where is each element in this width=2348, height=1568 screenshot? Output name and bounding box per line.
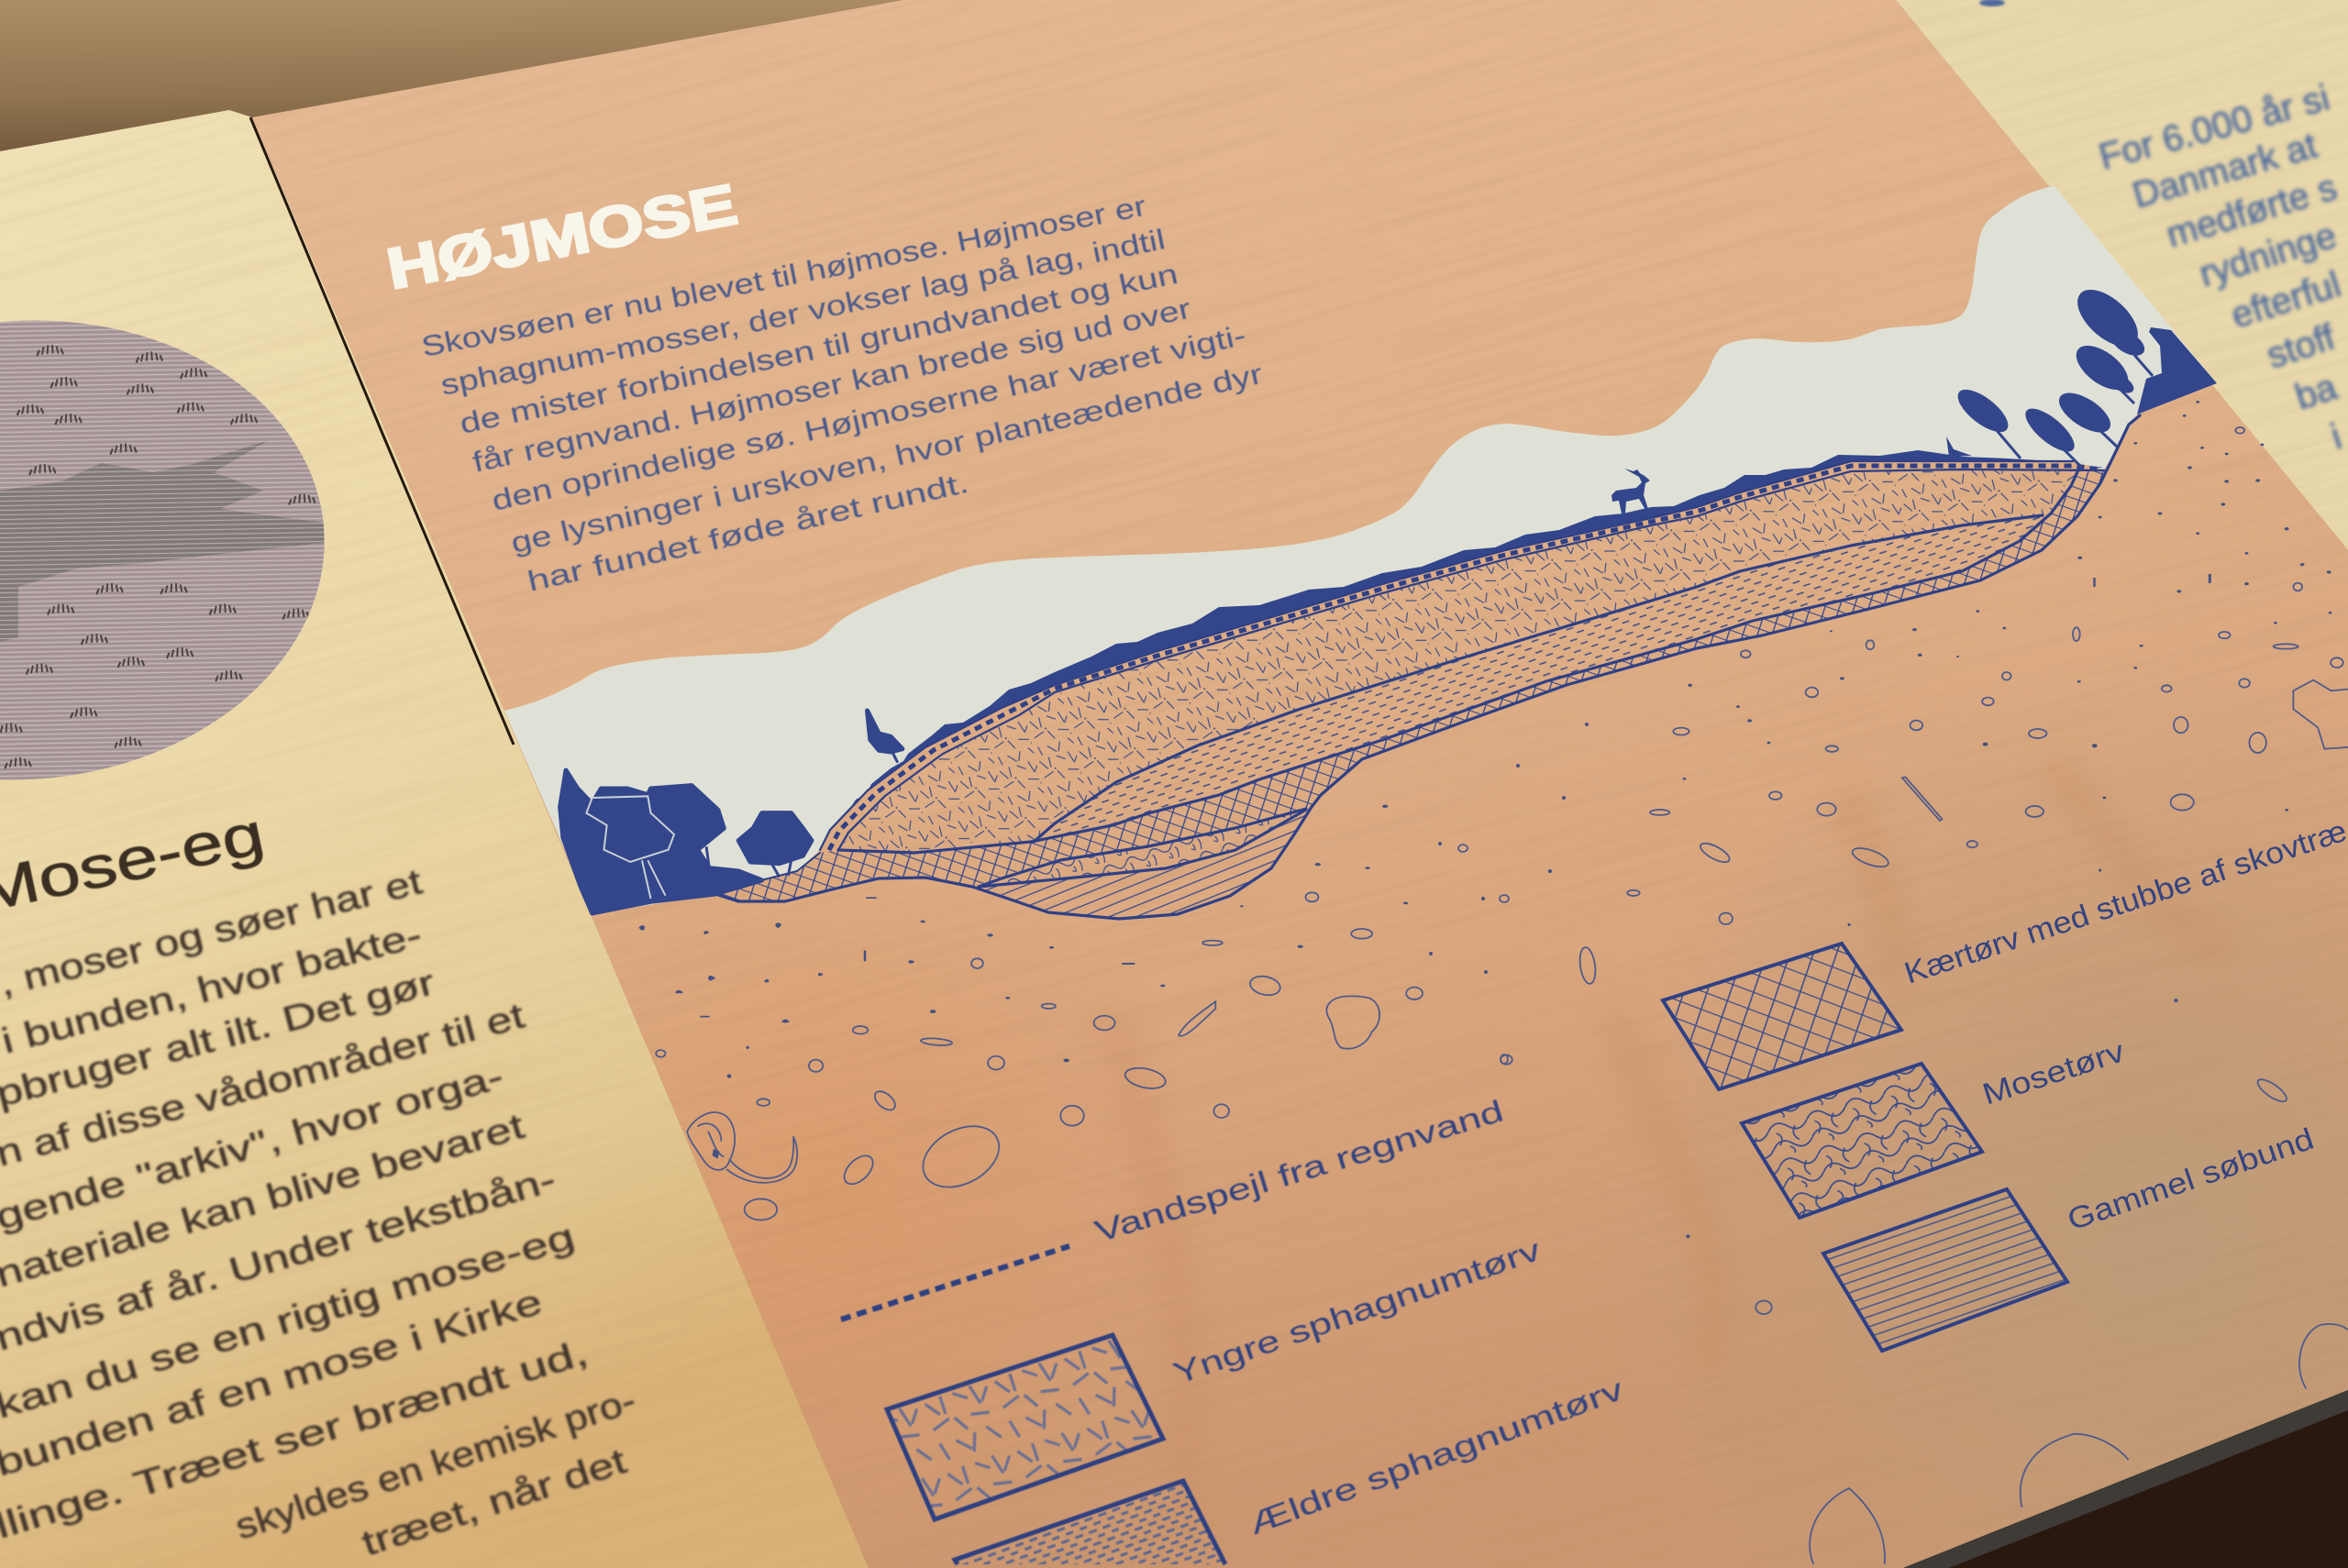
sediment bottom right <box>1627 840 2348 1564</box>
text block: højmose body: Skovsøen er nu blevet til højmose. Højmoser er <box>419 190 1148 363</box>
text block: mose-eg body: gende "arkiv", hvor orga- <box>0 1056 508 1238</box>
sediment centre <box>1429 723 1598 1064</box>
circular mose-eg illustration <box>0 312 339 789</box>
text block: højmose body: de mister forbindelsen til grundvandet og kun <box>457 258 1180 440</box>
text block: right panel: Danmark at <box>2128 125 2321 216</box>
layer: younger sphagnum peat <box>838 469 2080 853</box>
table background <box>0 0 1009 165</box>
layer: vegetation crust <box>820 450 2104 850</box>
layer: old lake bottom <box>972 807 1312 919</box>
panel: right plywood panel <box>1889 0 2348 559</box>
text block: right panel: ba <box>2290 367 2342 418</box>
peat boundary lines <box>715 415 2140 919</box>
text block: right panel: medførte s <box>2162 167 2342 256</box>
text block: right panel: efterful <box>2226 264 2345 337</box>
legend: bog peat <box>1742 1033 2129 1218</box>
left forest silhouette <box>560 711 903 913</box>
text block: mose-eg body: nateriale kan blive bevaret <box>0 1107 529 1296</box>
title: HØJMOSE: HØJMOSE <box>382 173 742 302</box>
text block: højmose body <box>419 190 1266 598</box>
sky silhouette <box>504 186 2217 914</box>
legend: water table: Vandspejl fra regnvand <box>1091 1093 1507 1249</box>
sediment far left and mammoth area <box>639 922 821 1220</box>
legend: younger sphagnum peat: Yngre sphagnumtørv <box>1168 1232 1545 1391</box>
text block: højmose body: sphagnum-mosser, der vokser lag på lag, indtil <box>437 223 1168 402</box>
icon: deer <box>1611 469 1650 513</box>
right trees silhouette <box>1946 280 2153 468</box>
text block: højmose body: den oprindelige sø. Højmoserne har været vigti- <box>489 319 1249 517</box>
layer: bog peat <box>979 809 1306 887</box>
text block: mose-eg body: , moser og søer har et <box>0 862 426 1004</box>
legend: old lake bottom: Gammel søbund <box>2063 1121 2318 1237</box>
legend: old lake bottom <box>1823 1121 2318 1351</box>
bog oak log <box>0 440 324 642</box>
legend: water table <box>841 1093 1507 1320</box>
legend <box>841 813 2348 1564</box>
text block: mose-eg body: træet, når det <box>357 1441 631 1564</box>
layer: older sphagnum peat <box>1034 513 2051 842</box>
legend: fen peat: Kærtørv med stubbe af skovtræ <box>1900 813 2348 990</box>
right forest edge <box>2137 327 2217 414</box>
panel: left mose-eg plywood panel <box>0 110 869 1568</box>
text block: mose-eg body <box>0 862 640 1564</box>
sediment lower left <box>782 996 1512 1195</box>
text block: mose-eg body: pbruger alt ilt. Det gør <box>0 963 438 1115</box>
text block: mose-eg body: llinge. Træet ser brændt ud, <box>0 1333 593 1547</box>
legend: younger sphagnum peat <box>887 1232 1545 1519</box>
text block: mose-eg body: n af disse vådområder til et <box>0 996 529 1175</box>
legend: bog peat: Mosetørv <box>1978 1033 2129 1111</box>
legend: fen peat <box>1663 813 2348 1089</box>
legend: older sphagnum peat: Ældre sphagnumtørv <box>1245 1372 1628 1541</box>
sediment under diagram, right <box>1650 401 2348 821</box>
text block: højmose body: har fundet føde året rundt. <box>525 467 971 598</box>
text block: mose-eg body: ndvis af år. Under tekstbån- <box>0 1160 560 1359</box>
text block: højmose body: får regnvand. Højmoser kan brede sig ud over <box>470 293 1193 479</box>
text block: mose-eg body: kan du se en rigtig mose-eg <box>0 1217 579 1427</box>
right panel top mark <box>1979 0 2005 6</box>
panel gap line <box>250 117 514 745</box>
text block: right panel: i <box>2326 416 2346 458</box>
layer: fen peat <box>715 470 2104 901</box>
hill cross-section diagram <box>560 280 2217 919</box>
text block: right panel: rydninge <box>2195 215 2341 295</box>
sediment left of basin <box>639 805 1423 1009</box>
legend: older sphagnum peat <box>955 1372 1628 1564</box>
board edge and dark table corner <box>1903 1390 2348 1568</box>
icon: mammoth skull <box>687 1112 797 1183</box>
text block: højmose body: ge lysninger i urskoven, hvor planteædende dyr <box>508 358 1266 559</box>
text block: right panel: For 6.000 år si <box>2095 77 2333 178</box>
layer: water table band <box>820 461 2104 850</box>
text block: right panel: stoff <box>2262 316 2341 377</box>
text block: mose-eg body: bunden af en mose i Kirke <box>0 1282 547 1485</box>
text block: right panel <box>2095 77 2346 458</box>
text block: mose-eg body: skyldes en kemisk pro- <box>230 1381 640 1548</box>
grass tufts <box>0 345 316 768</box>
text block: mose-eg body: i bunden, hvor bakte- <box>0 915 426 1062</box>
